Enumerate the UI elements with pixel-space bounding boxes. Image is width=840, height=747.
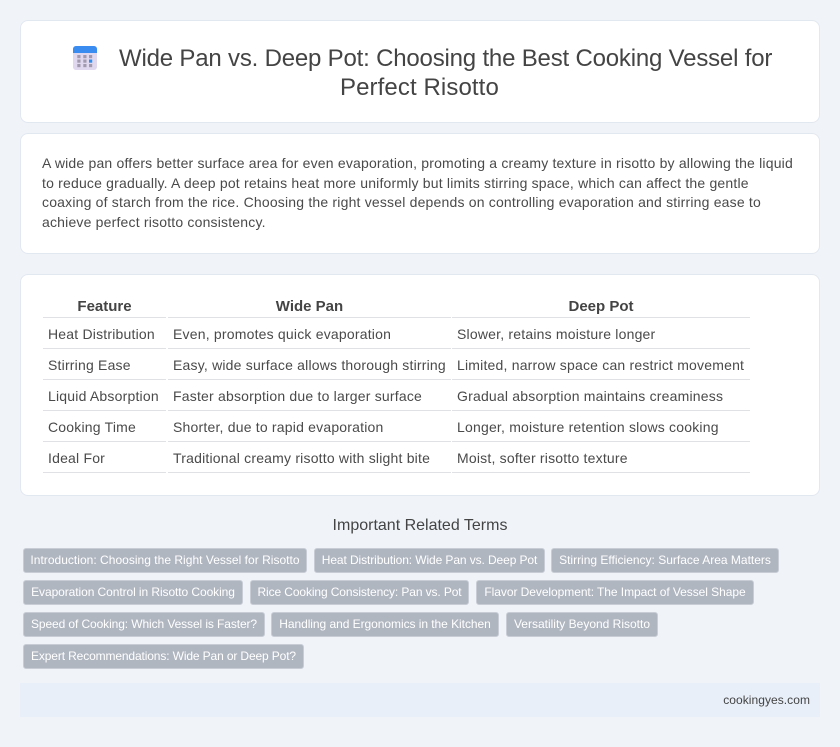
comparison table [43, 298, 750, 473]
table rows: Moist, softer risotto texture [457, 450, 628, 466]
intro panel [20, 133, 820, 254]
table rows: Heat Distribution [48, 326, 155, 342]
title [119, 45, 772, 101]
table rows: Ideal For [48, 450, 105, 466]
title: Perfect Risotto [340, 74, 499, 101]
table rows: Cooking Time [48, 419, 136, 435]
table rows: Slower, retains moisture longer [457, 326, 655, 342]
related term tags [23, 548, 779, 669]
table rows: Easy, wide surface allows thorough stirring [173, 357, 446, 373]
related term tags: Heat Distribution: Wide Pan vs. Deep Pot [322, 553, 537, 567]
table rows: Faster absorption due to larger surface [173, 388, 422, 404]
table rows: Even, promotes quick evaporation [173, 326, 391, 342]
related term tags: Expert Recommendations: Wide Pan or Deep Pot? [31, 649, 296, 663]
related term tags: Flavor Development: The Impact of Vessel Shape [484, 585, 746, 599]
related term tags: Evaporation Control in Risotto Cooking [31, 585, 235, 599]
table rows: Shorter, due to rapid evaporation [173, 419, 384, 435]
table rows: Traditional creamy risotto with slight bite [173, 450, 430, 466]
table rows: Longer, moisture retention slows cooking [457, 419, 719, 435]
table headers [77, 298, 634, 315]
related term tags: Stirring Efficiency: Surface Area Matters [559, 553, 771, 567]
comparison table panel [20, 274, 820, 496]
related terms heading: Important Related Terms [333, 517, 507, 534]
footer source: cookingyes.com [723, 693, 810, 707]
related term tags: Rice Cooking Consistency: Pan vs. Pot [257, 585, 462, 599]
table headers: Deep Pot [568, 298, 634, 315]
table rows: Limited, narrow space can restrict movement [457, 357, 744, 373]
icon: calendar [73, 46, 97, 70]
table headers: Feature [77, 298, 132, 315]
table rows: Liquid Absorption [48, 388, 159, 404]
table rows: Gradual absorption maintains creaminess [457, 388, 723, 404]
related term tags: Versatility Beyond Risotto [514, 617, 650, 631]
header panel [20, 20, 820, 123]
table rows [43, 317, 750, 473]
table rows: Stirring Ease [48, 357, 131, 373]
related term tags: Introduction: Choosing the Right Vessel for Risotto [30, 553, 300, 567]
footer bar [20, 683, 820, 717]
title: Wide Pan vs. Deep Pot: Choosing the Best Cooking Vessel for [119, 45, 772, 72]
related term tags: Handling and Ergonomics in the Kitchen [279, 617, 491, 631]
table headers: Wide Pan [276, 298, 343, 315]
intro text: A wide pan offers better surface area for even evaporation, promoting a creamy texture in risotto by allowing the liquid to reduce gradually. A deep pot retains heat more uniformly but limits stirring space, which can affect the gentle coaxing of starch from the rice. Choosing the right vessel depends on controlling evaporation and stirring ease to achieve perfect risotto consistency. [42, 155, 793, 230]
related term tags: Speed of Cooking: Which Vessel is Faster? [31, 617, 257, 631]
